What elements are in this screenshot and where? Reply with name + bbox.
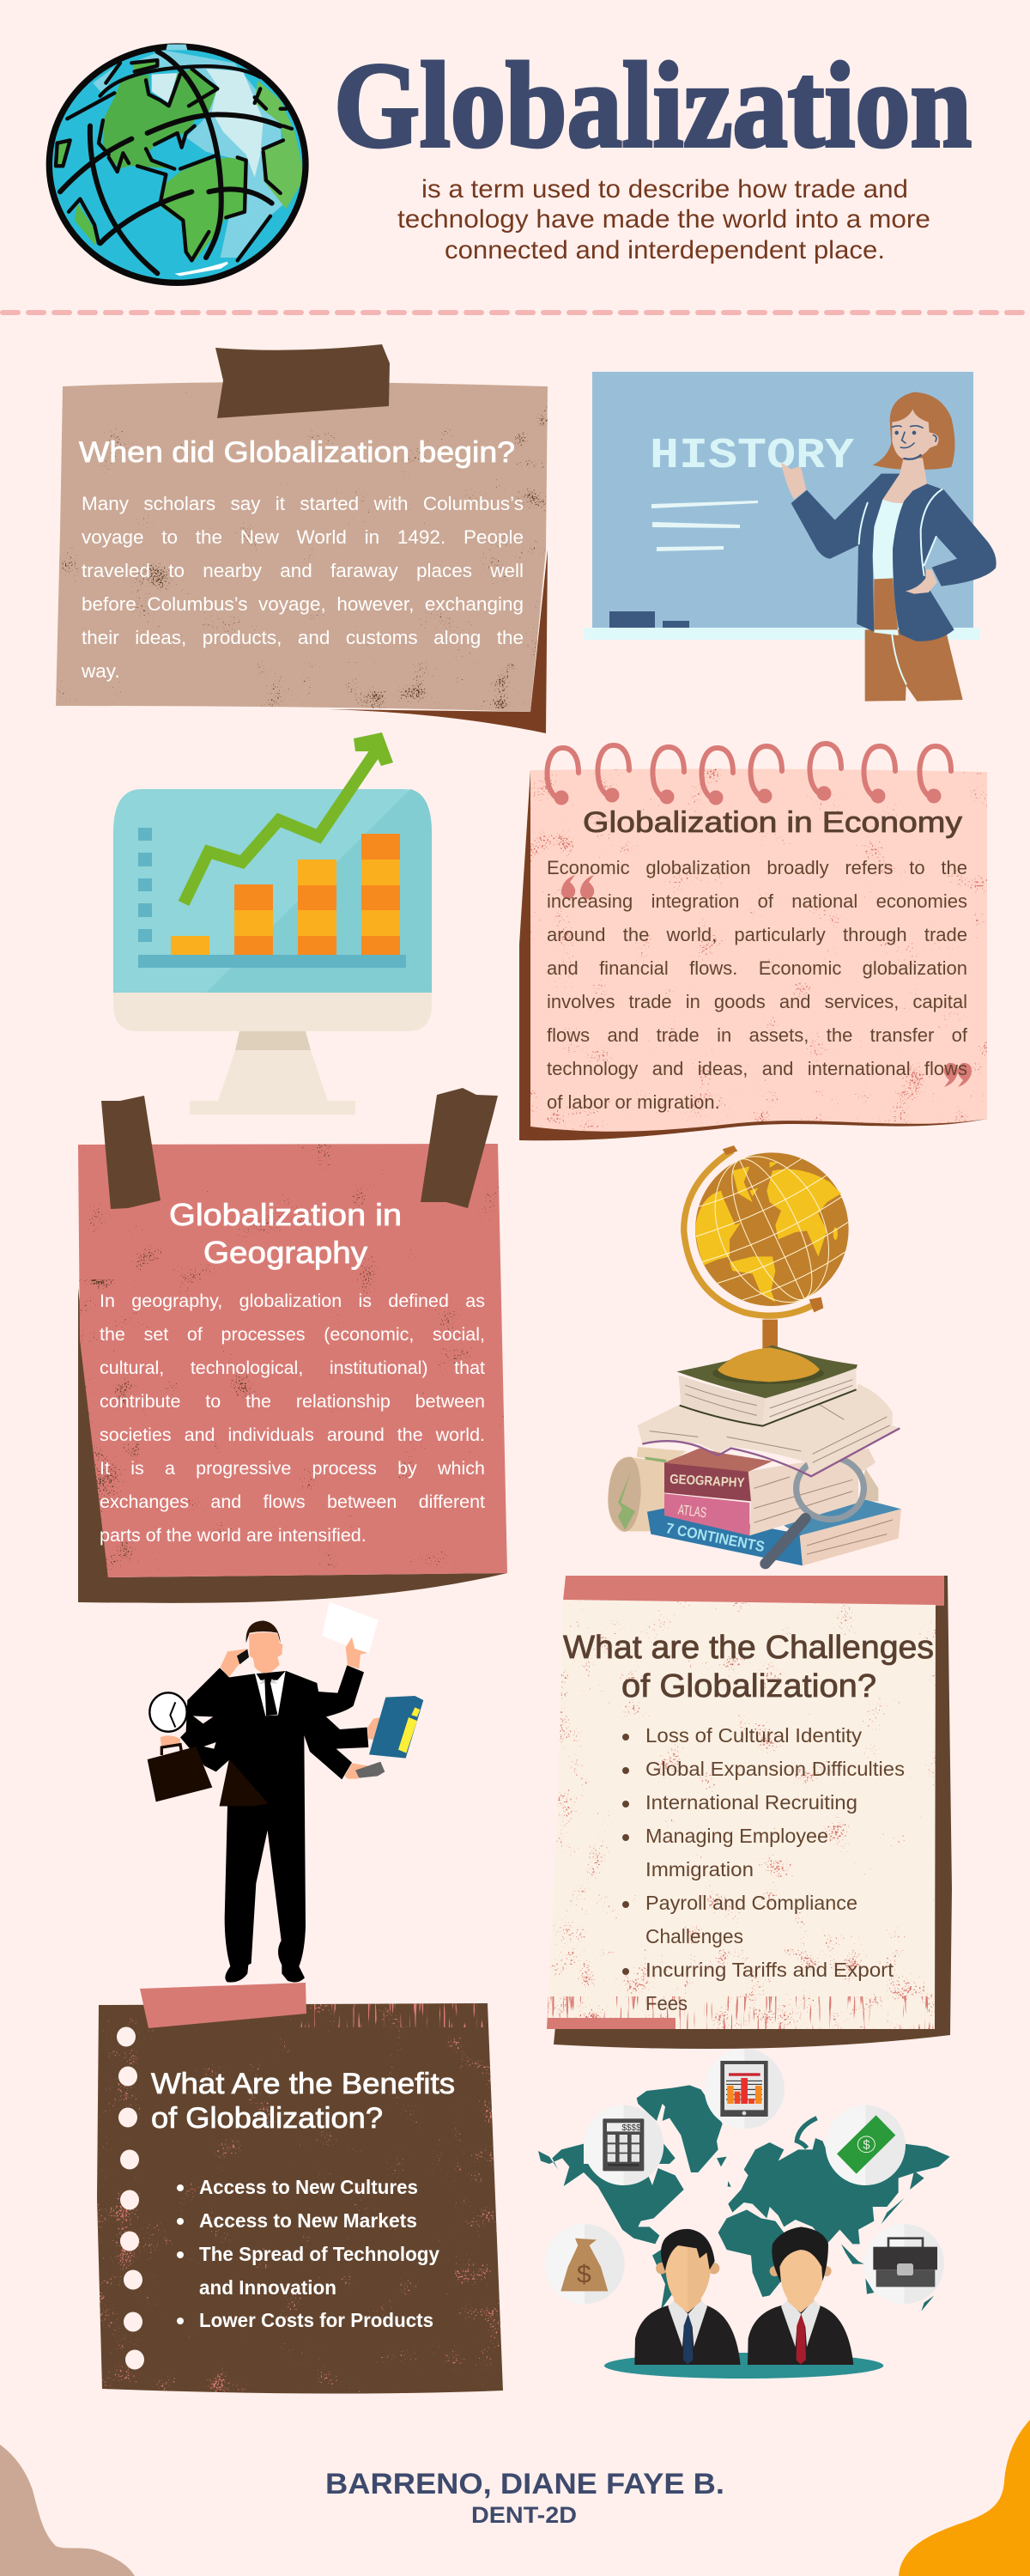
panel 5 list: Access to New Markets <box>199 2209 417 2232</box>
clock <box>149 1692 187 1732</box>
decorative blob: bottom right <box>899 2420 1030 2576</box>
book spine labels: GEOGRAPHY <box>670 1472 745 1491</box>
panel 1 paper <box>56 382 548 712</box>
panel 4 paper <box>547 1600 936 2029</box>
blue folder <box>369 1696 423 1759</box>
panel 1 body: way. <box>82 660 120 682</box>
panel 3 paper <box>78 1144 507 1577</box>
icon: banknote: $ <box>863 2139 869 2153</box>
panel: globalization in economy <box>519 744 991 1140</box>
panel 4 list: Managing Employee <box>645 1825 828 1847</box>
panel 5 list: Access to New Cultures <box>199 2176 418 2198</box>
teacher figure <box>781 392 997 702</box>
monitor stand <box>235 1031 311 1050</box>
panel 1 body: before Columbus’s voyage, however, exchanging <box>82 593 524 615</box>
panel 2 body: Economic globalization broadly refers to the <box>547 857 967 878</box>
panel 3 heading: Globalization in <box>169 1197 402 1232</box>
panel 2 heading: Globalization in Economy <box>583 806 962 839</box>
stack of books: ATLAS <box>677 1501 707 1521</box>
illustration: teacher at board <box>584 372 997 702</box>
panel 4 heading: What are the Challenges <box>563 1630 934 1666</box>
icon: calculator <box>603 2118 644 2171</box>
panel 3 heading <box>169 1197 402 1270</box>
panel 3 body: cultural, technological, institutional) that <box>100 1358 485 1378</box>
panel 4 list: Incurring Tariffs and Export <box>645 1959 894 1981</box>
title: Globalization <box>334 37 972 173</box>
paper sheet <box>322 1602 379 1655</box>
icon: calculator: $$$$ <box>621 2123 641 2133</box>
icon: globe <box>49 45 306 283</box>
panel 4 heading <box>563 1630 934 1704</box>
quote marks <box>561 875 972 1087</box>
chalkboard <box>592 372 973 628</box>
panel 1 body: Many scholars say it started with Columbus’s <box>82 493 524 514</box>
panel 4 list: Challenges <box>645 1925 743 1947</box>
panel 3 body: exchanges and flows between different <box>100 1492 485 1512</box>
panel 4 list: Global Expansion Difficulties <box>645 1758 905 1780</box>
panel 4 backing <box>554 1576 952 2049</box>
panel 2 body: flows and trade in assets, the transfer of <box>547 1024 967 1046</box>
panel 4 list: Fees <box>645 1992 688 2014</box>
world map <box>538 2085 950 2312</box>
panel 5 list: The Spread of Technology <box>199 2243 439 2265</box>
panel 4 list: International Recruiting <box>645 1791 857 1814</box>
chart axis <box>138 828 406 968</box>
panel 2 body: around the world, particularly through trade <box>547 924 967 945</box>
footer: author name: BARRENO, DIANE FAYE B. <box>325 2468 724 2500</box>
illustration: monitor with growth chart <box>113 732 432 1115</box>
panel 4 list: Payroll and Compliance <box>645 1892 857 1914</box>
panel 5 paper <box>97 2003 503 2394</box>
magnifier ring <box>797 1457 863 1519</box>
panel: when did globalization begin <box>52 344 549 733</box>
decorative blob: bottom left <box>0 2445 135 2576</box>
panel: globalization in geography <box>77 1088 511 1603</box>
panel 5 tape <box>140 1983 306 2028</box>
bar chart <box>171 834 400 955</box>
panel 2 body: and financial flows. Economic globalization <box>547 957 967 979</box>
magnifying glass handle <box>766 1518 805 1564</box>
chalk word: HISTORY <box>650 432 854 481</box>
icon: money bag: $ <box>577 2260 591 2288</box>
panel 5 list <box>177 2176 439 2331</box>
panel 5 heading: of Globalization? <box>151 2102 383 2135</box>
panel 2 body: technology and ideas, and international flows <box>547 1058 967 1079</box>
panel 3 body: parts of the world are intensified. <box>100 1525 367 1546</box>
briefcase <box>148 1747 212 1801</box>
panel 4 list <box>622 1724 905 2014</box>
subtitle text: technology have made the world into a more <box>397 205 930 234</box>
spiral rings <box>548 744 951 805</box>
panel: what are the benefits <box>96 1983 504 2396</box>
panel 1 body: traveled to nearby and faraway places well <box>82 560 524 581</box>
panel 1 fold shadow <box>329 550 548 733</box>
panel 2 body: involves trade in goods and services, capital <box>547 991 967 1012</box>
phone <box>355 1762 385 1778</box>
arrow: growth <box>184 732 393 903</box>
illustration: world map with businessmen <box>538 2049 950 2379</box>
panel 2 body: of labor or migration. <box>547 1091 720 1113</box>
panel 5 heading <box>151 2068 455 2135</box>
panel 5 list: and Innovation <box>199 2276 336 2299</box>
desk globe <box>670 1127 874 1350</box>
subtitle text: connected and interdependent place. <box>445 236 885 264</box>
icon: briefcase <box>873 2239 937 2287</box>
panel 1 body <box>82 487 524 693</box>
panel 2 paper <box>530 769 987 1132</box>
head <box>246 1620 281 1643</box>
panel 4 list: Loss of Cultural Identity <box>645 1724 863 1747</box>
binder holes <box>117 2026 144 2370</box>
panel 5 heading: What Are the Benefits <box>151 2068 455 2100</box>
hands <box>221 1649 248 1677</box>
panel 2 body <box>547 851 967 1126</box>
subtitle text: is a term used to describe how trade and <box>421 175 908 204</box>
panel 1 body: voyage to the New World in 1492. People <box>82 526 524 548</box>
panel 4 list: Immigration <box>645 1858 754 1880</box>
round icon backgrounds <box>544 2049 944 2304</box>
panel 1 tape <box>215 344 390 418</box>
panel 1 body: their ideas, products, and customs along the <box>82 627 524 648</box>
businessman right <box>748 2227 853 2365</box>
shirt and tie <box>254 1670 286 1716</box>
icon: tablet chart <box>720 2061 768 2117</box>
panel 3 tapes <box>101 1096 161 1209</box>
panel 3 body: the set of processes (economic, social, <box>100 1324 485 1345</box>
panel 3 body: It is a progressive process by which <box>100 1458 485 1479</box>
stack of books: 7 CONTINENTS <box>664 1519 766 1555</box>
businessman left <box>634 2229 741 2365</box>
panel 3 body: In geography, globalization is defined as <box>100 1291 485 1311</box>
monitor screen <box>113 789 432 993</box>
panel 3 body: societies and individuals around the world. <box>100 1425 485 1445</box>
stack of books <box>608 1346 901 1565</box>
platform <box>604 2353 883 2379</box>
panel: what are the challenges <box>545 1576 952 2049</box>
illustration: multitasking businessman <box>148 1602 423 1983</box>
icon: money bag <box>560 2239 608 2291</box>
panel 3 body: contribute to the relationship between <box>100 1391 485 1412</box>
panel 2 backing <box>519 770 987 1140</box>
suit <box>180 1665 368 1983</box>
icon: banknote <box>837 2115 895 2174</box>
panel 3 heading: Geography <box>203 1235 367 1270</box>
panel 5 list: Lower Costs for Products <box>199 2309 433 2331</box>
panel 1 heading: When did Globalization begin? <box>79 436 515 469</box>
panel 4 heading: of Globalization? <box>621 1668 876 1704</box>
panel 3 body <box>100 1285 485 1559</box>
illustration: globe on books <box>608 1127 901 1565</box>
panel 2 body: increasing integration of national economies <box>547 890 967 912</box>
footer: class: DENT-2D <box>471 2502 577 2528</box>
panel 3 backing <box>78 1288 507 1603</box>
subtitle text <box>397 175 930 264</box>
